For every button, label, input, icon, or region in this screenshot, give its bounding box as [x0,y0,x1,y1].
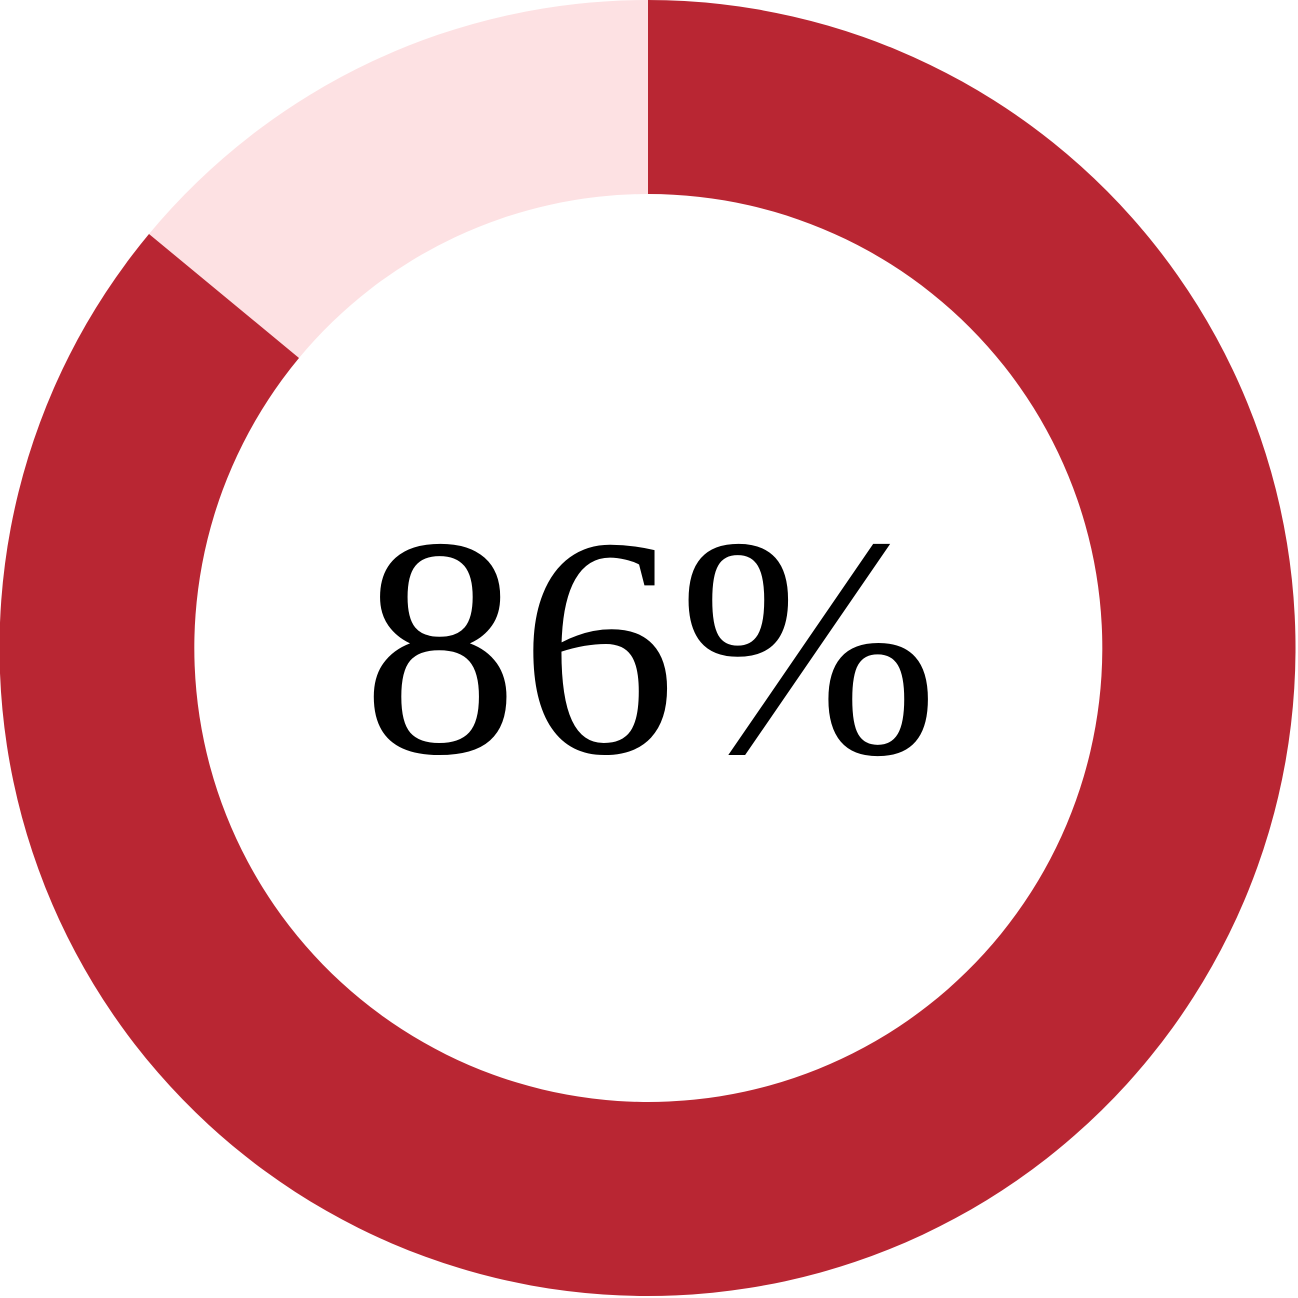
percentage label: 86% [362,473,940,820]
remaining segment [149,0,648,358]
